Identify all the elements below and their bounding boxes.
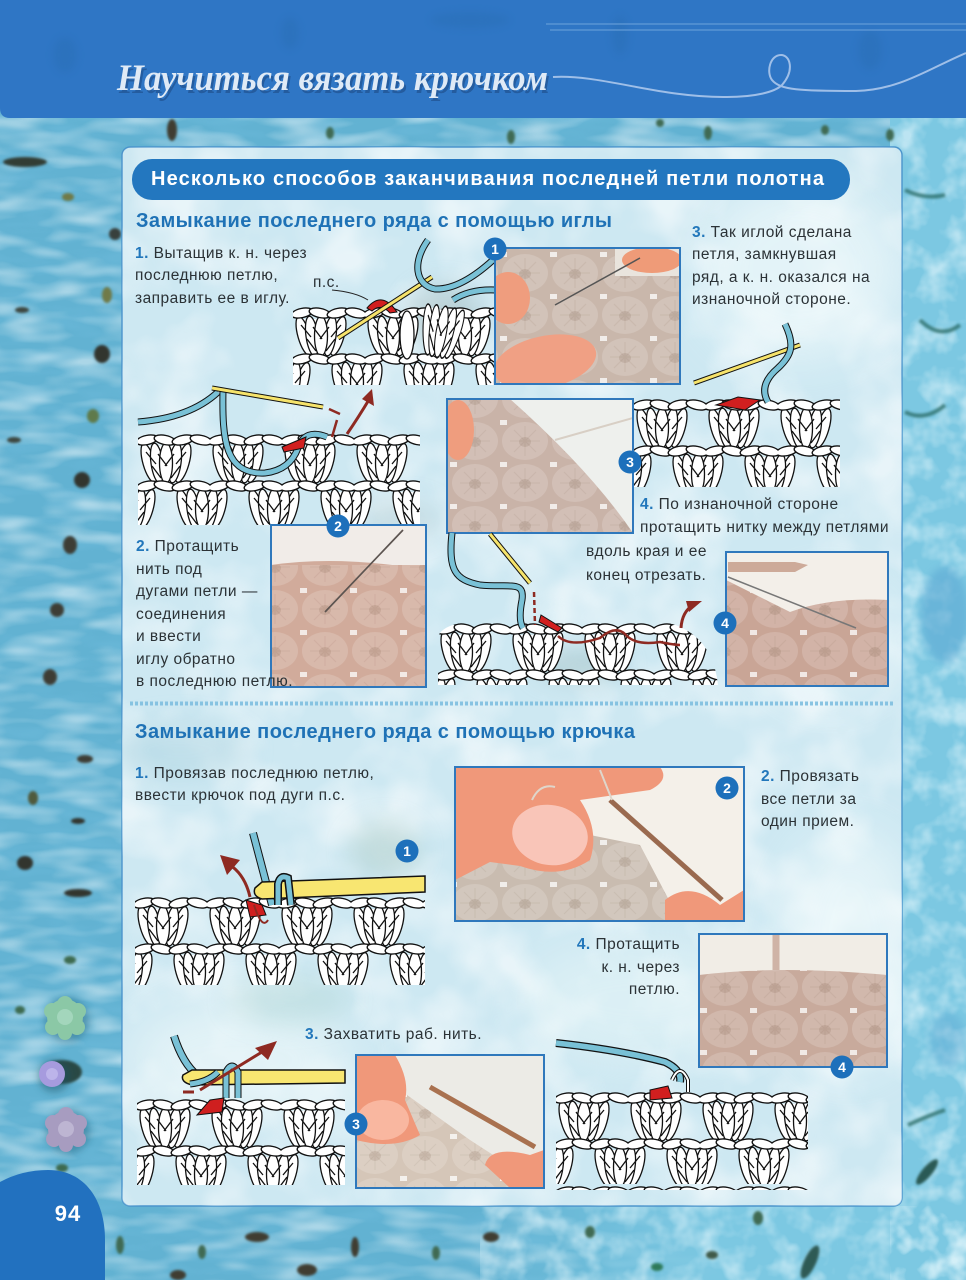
badge: 4 hook xyxy=(830,1056,854,1078)
text: needle step 3: ряд, а к. н. оказался на xyxy=(692,269,870,286)
side flowers xyxy=(38,996,90,1154)
photo 2 xyxy=(271,525,426,687)
text: needle step 1: последнюю петлю, xyxy=(135,267,278,284)
text: hook step 1: ввести крючок под дуги п.с. xyxy=(135,787,345,804)
badge: 1: 1 xyxy=(491,241,499,257)
badge: 2 large photo: 2 xyxy=(723,780,731,796)
text: hook step 1: 1. Провязав последнюю петлю, xyxy=(135,765,374,782)
header band xyxy=(0,0,966,118)
page number tab: 94 xyxy=(55,1201,81,1226)
text: hook step 4: петлю. xyxy=(629,981,680,998)
badge: 2 large photo xyxy=(716,776,738,800)
divider xyxy=(130,702,893,706)
badge: 4 xyxy=(714,612,736,634)
header title: Научиться вязать крючком xyxy=(116,58,548,99)
text: needle step 2: иглу обратно xyxy=(136,651,236,668)
text: needle step 1 xyxy=(135,245,307,307)
text: needle step 4: конец отрезать. xyxy=(586,567,706,584)
photo 1 xyxy=(496,249,679,383)
badge: 3 xyxy=(618,450,642,474)
page number tab xyxy=(0,1170,105,1280)
text: needle step 2: дугами петли — xyxy=(136,583,258,600)
text: needle step 3 xyxy=(692,224,870,308)
main heading bar xyxy=(132,159,850,200)
badge: 3 hook xyxy=(344,1112,368,1136)
text: needle step 4: протащить нитку между петлями xyxy=(640,519,889,536)
photo 4 frame xyxy=(726,552,888,686)
badge: 4 hook: 4 xyxy=(838,1059,846,1075)
text: needle step 2: и ввести xyxy=(136,628,201,645)
photo large 2 xyxy=(455,767,744,921)
right yarn area xyxy=(480,110,966,1280)
text: hook step 3: 3. Захватить раб. нить. xyxy=(305,1026,482,1043)
subheading: needle: Замыкание последнего ряда с помощью иглы xyxy=(136,210,612,232)
photo 2 frame xyxy=(271,525,426,687)
header title shadow: Научиться вязать крючком xyxy=(118,61,550,102)
diagram: needle step 1: п.с. xyxy=(313,274,340,291)
badge: 2: 2 xyxy=(334,518,342,534)
text: needle step 4 xyxy=(586,496,889,584)
text: needle step 2: соединения xyxy=(136,606,226,623)
photo hook 3 frame xyxy=(356,1055,544,1188)
badge: 4: 4 xyxy=(721,615,729,631)
badge: 2 xyxy=(326,514,350,538)
diagram: needle step 1 xyxy=(293,240,495,385)
diagram: needle step 4 xyxy=(438,533,719,685)
text: needle step 4: 4. По изнаночной стороне xyxy=(640,496,839,513)
diagram: needle step 3 xyxy=(634,324,840,487)
photo hook 4 frame xyxy=(699,934,887,1067)
photo 4 xyxy=(726,552,888,686)
main panel xyxy=(110,147,920,1206)
flower: lilac xyxy=(45,1107,90,1154)
photo hook 4 xyxy=(699,934,887,1067)
bottom right yarn area xyxy=(480,1200,966,1280)
text: needle step 2: 2. Протащить xyxy=(136,538,239,555)
text: hook step 4: к. н. через xyxy=(601,959,680,976)
text: needle step 1: заправить ее в иглу. xyxy=(135,290,290,307)
diagram: hook step 1 xyxy=(135,833,425,985)
text: hook step 4 xyxy=(577,936,680,998)
badge: 3 hook: 3 xyxy=(352,1116,360,1132)
photo 3 frame xyxy=(447,399,633,533)
text: needle step 2: нить под xyxy=(136,561,202,578)
diagram: needle step 2 xyxy=(138,388,420,525)
diagram: hook step 3 xyxy=(137,1036,345,1185)
badge: 1 hook: 1 xyxy=(403,843,411,859)
diagram: hook step 4 xyxy=(556,1043,808,1190)
photo large 2 frame xyxy=(455,767,744,921)
flower: green xyxy=(44,996,89,1042)
flower: purple xyxy=(38,1060,70,1092)
text: hook step 4: 4. Протащить xyxy=(577,936,680,953)
photo 3 xyxy=(442,399,633,533)
badge: 3: 3 xyxy=(626,454,634,470)
subheading: hook: Замыкание последнего ряда с помощью крючка xyxy=(135,721,636,743)
photo 1 frame xyxy=(495,248,680,384)
text: hook step 2: все петли за xyxy=(761,791,856,808)
text: hook step 1 xyxy=(135,765,374,804)
photo hook 3 xyxy=(356,1055,544,1188)
text: needle step 2 xyxy=(136,538,293,690)
badge: 1 xyxy=(484,238,506,260)
text: needle step 2: в последнюю петлю. xyxy=(136,673,293,690)
text: needle step 3: петля, замкнувшая xyxy=(692,246,837,263)
text: needle step 4: вдоль края и ее xyxy=(586,543,707,560)
text: hook step 2: 2. Провязать xyxy=(761,768,859,785)
text: needle step 3: 3. Так иглой сделана xyxy=(692,224,852,241)
text: hook step 2: один прием. xyxy=(761,813,854,830)
header thread xyxy=(553,53,966,97)
text: needle step 3: изнаночной стороне. xyxy=(692,291,851,308)
text: needle step 1: 1. Вытащив к. н. через xyxy=(135,245,307,262)
badge: 1 hook xyxy=(396,840,418,862)
main heading bar: Несколько способов заканчивания последней петли полотна xyxy=(151,168,825,190)
text: hook step 2 xyxy=(761,768,859,830)
